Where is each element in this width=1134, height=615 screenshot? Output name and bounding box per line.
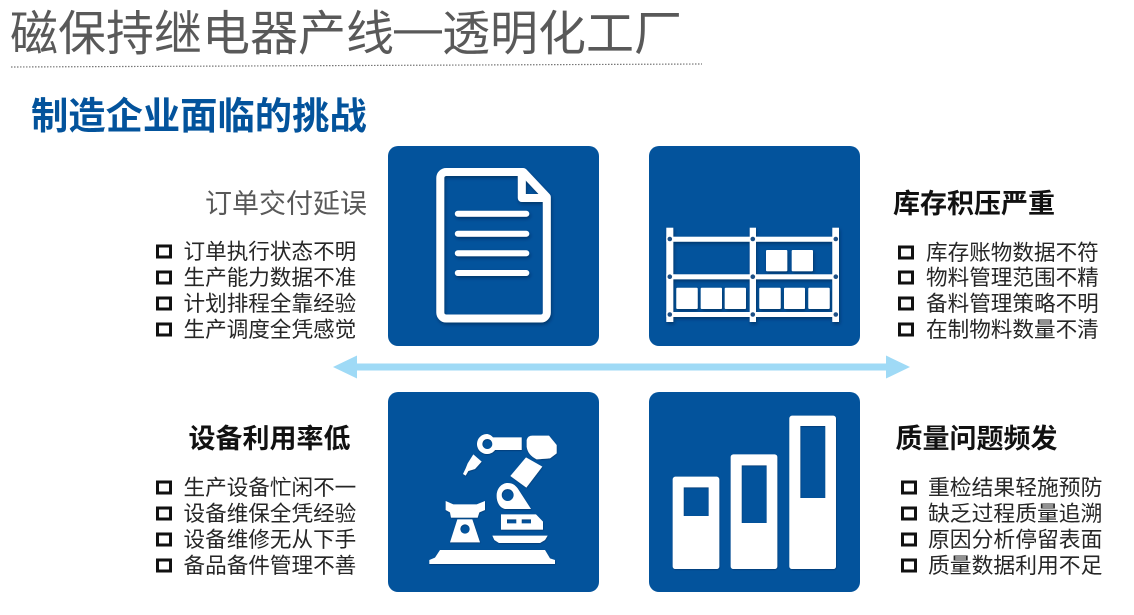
- checklist: frequent quality problems: 缺乏过程质量追溯: [928, 501, 1102, 526]
- checklist: inventory backlog: 物料管理范围不精: [926, 265, 1099, 290]
- text block: inventory backlog: [893, 189, 1099, 342]
- panel: robot tile: [388, 392, 599, 592]
- checklist: inventory backlog: 库存账物数据不符: [926, 240, 1099, 265]
- text block: order delivery delays: [158, 189, 367, 342]
- panel: bar chart tile: [649, 392, 860, 592]
- checklist: low equipment utilization: [158, 475, 357, 578]
- checklist: low equipment utilization: 生产设备忙闲不一: [184, 475, 356, 500]
- icon: bars: [673, 416, 836, 569]
- title dotted divider: [11, 64, 702, 67]
- text block: low equipment utilization: [158, 424, 357, 578]
- checklist: low equipment utilization: 设备维保全凭经验: [184, 501, 357, 526]
- heading: frequent quality problems: 质量问题频发: [896, 424, 1058, 454]
- heading: inventory backlog: 库存积压严重: [893, 189, 1055, 219]
- checklist: order delivery delays: 生产调度全凭感觉: [184, 317, 356, 342]
- icon: document: [440, 172, 547, 318]
- checklist: frequent quality problems: 重检结果轻施预防: [928, 475, 1102, 500]
- text block: frequent quality problems: [896, 424, 1102, 578]
- title: —: [394, 2, 442, 55]
- title: 磁保持继电器产线: [10, 8, 394, 61]
- checklist: order delivery delays: 生产能力数据不准: [184, 265, 356, 290]
- arrow: double-headed horizontal: [333, 356, 910, 378]
- title: 透明化工厂: [442, 8, 682, 61]
- checklist: frequent quality problems: 原因分析停留表面: [928, 527, 1102, 552]
- checklist: inventory backlog: [900, 240, 1099, 342]
- checklist: frequent quality problems: 质量数据利用不足: [928, 553, 1102, 578]
- checklist: frequent quality problems: [902, 475, 1102, 578]
- section heading: 制造企业面临的挑战: [31, 95, 367, 137]
- checklist: inventory backlog: 备料管理策略不明: [926, 291, 1099, 316]
- heading: low equipment utilization: 设备利用率低: [188, 424, 350, 454]
- heading: order delivery delays: 订单交付延误: [205, 189, 367, 219]
- panel: document tile: [388, 146, 599, 346]
- icon: robot arm: [429, 434, 557, 564]
- checklist: order delivery delays: 计划排程全靠经验: [184, 291, 357, 316]
- checklist: low equipment utilization: 备品备件管理不善: [184, 553, 356, 578]
- checklist: low equipment utilization: 设备维修无从下手: [184, 527, 356, 552]
- checklist: order delivery delays: 订单执行状态不明: [184, 239, 356, 264]
- panel: warehouse shelf tile: [649, 146, 860, 346]
- icon: warehouse shelf: [666, 228, 839, 322]
- checklist: order delivery delays: [158, 239, 357, 342]
- checklist: inventory backlog: 在制物料数量不清: [926, 317, 1099, 342]
